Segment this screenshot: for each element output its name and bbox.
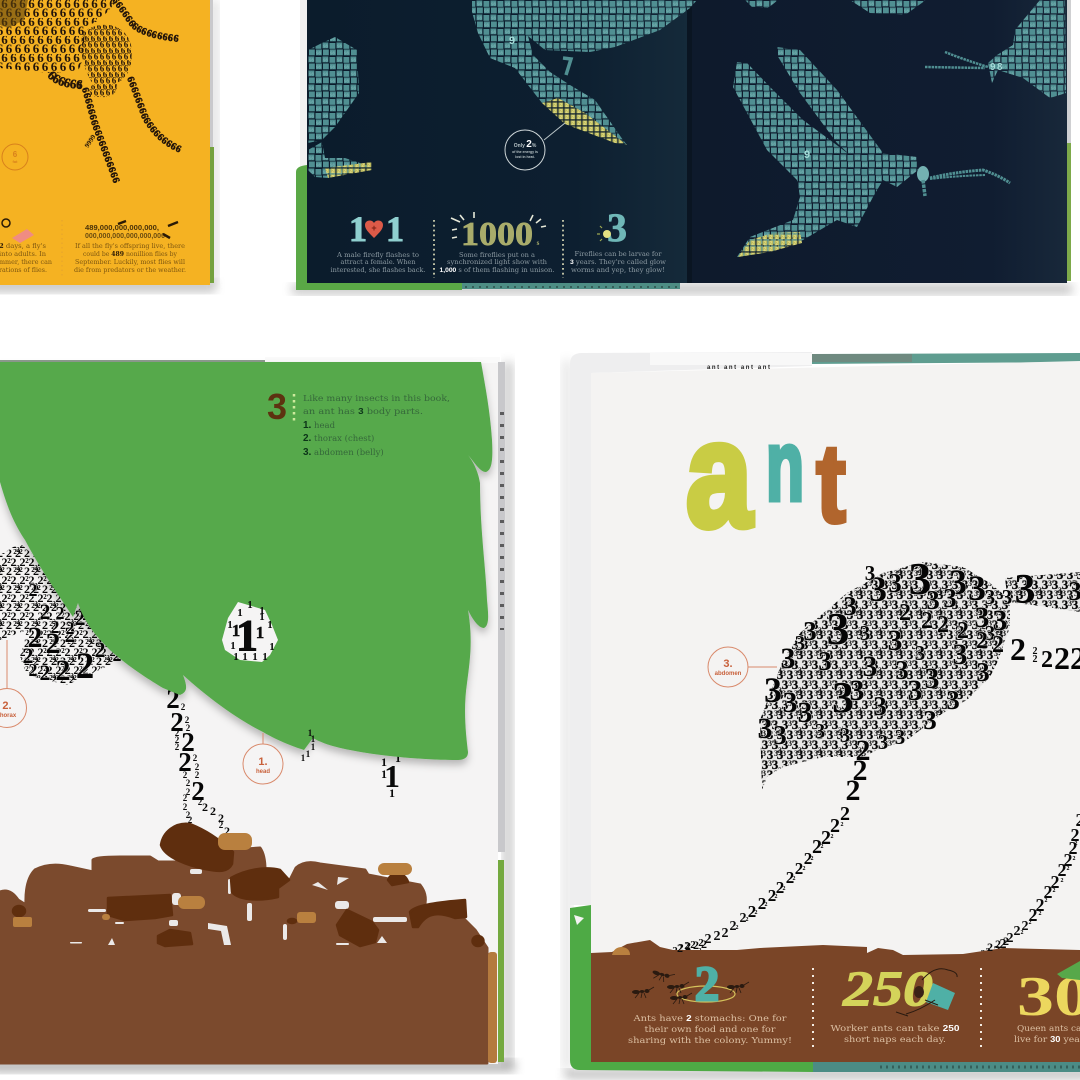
panel: left ant book page with leaf — [0, 357, 515, 1072]
stat: 3: Fireflies can be larvae for — [574, 250, 662, 258]
ant abdomen made of number 3: 333333333333 — [795, 561, 1012, 754]
callout: fly part number: 6 — [13, 150, 18, 159]
stat: offspring count: If all the fly's offspring live, there — [75, 243, 185, 250]
stat: 3: 3 years. They're called glow — [570, 258, 666, 266]
ant leg: left: 2222 — [812, 803, 850, 858]
hole in leaf showing ant head: 111111111111 — [227, 599, 275, 663]
stat: offspring count: die from predators or the weather. — [74, 267, 186, 274]
ant abdomen made of number 3: 3 — [908, 553, 932, 604]
stat: 3: 3 — [607, 205, 627, 250]
stat: 1 plus 1: attract a female. When — [340, 258, 416, 266]
ant leg: right: 22222 — [994, 919, 1028, 959]
callout: abdomen: 3. — [723, 658, 733, 670]
ant leg: right: 22222 — [976, 947, 992, 971]
stat: 2 stomachs: Ants have 2 stomachs: One for — [632, 1014, 787, 1023]
panel: dark firefly book spread — [292, 0, 1072, 294]
callout: head: head — [256, 769, 270, 775]
stat: 250 naps: 250 — [842, 960, 933, 1016]
icon: ants — [632, 967, 749, 1004]
stat: 30 years queen — [1014, 961, 1080, 1044]
ground strip: 2222 — [677, 937, 707, 955]
callout: abdomen: abdomen — [715, 671, 742, 677]
ant abdomen made of number 3: 2 — [1041, 647, 1053, 673]
callout: energy lost in heat — [505, 123, 565, 170]
stat: 1 plus 1: 1 — [386, 209, 404, 249]
callout: thorax: 2. — [2, 700, 12, 712]
hole in leaf showing ant head: 11 — [232, 621, 264, 642]
panel: right ant book page — [562, 352, 1080, 1078]
stat: 3 — [570, 205, 666, 274]
fact: 3 body parts: an ant has 3 body parts. — [303, 406, 423, 417]
leaf — [0, 362, 492, 760]
stat: 2 stomachs: 2 — [694, 955, 720, 1011]
title: ant: t — [816, 421, 846, 546]
ant leg: right — [976, 810, 1080, 971]
ant leg made of number 2: 222222222222222222 — [175, 702, 224, 830]
title: ant: n — [766, 410, 804, 522]
fact: 3 body parts: 3. abdomen (belly) — [303, 447, 384, 458]
ground strip: 222 — [987, 934, 1009, 954]
stat: 1000: synchronized light show with — [447, 258, 547, 266]
firefly: right partial — [925, 0, 1066, 98]
ant leg made of number 2: 22222 — [166, 684, 205, 806]
stat fragment: days to adulthood: rations of flies. — [0, 267, 47, 274]
ant abdomen made of number 3: 3 — [1014, 567, 1036, 613]
fly figure built from number 6 — [0, 0, 182, 183]
callout: fly part number: fat — [13, 159, 18, 164]
stat: 250 naps: short naps each day. — [844, 1035, 946, 1044]
fact: 3 body parts — [267, 386, 450, 458]
stat fragment: days to adulthood: mmer, there can — [0, 259, 52, 266]
title: ant — [686, 390, 846, 558]
stat fragment: days to adulthood — [0, 219, 52, 274]
ground strip — [591, 934, 1080, 1062]
firefly: centre with glowing abdomen: 9 — [509, 35, 515, 47]
stat: offspring count: 489,000,000,000,000, — [85, 225, 159, 232]
ant abdomen made of number 3: 3333333333333 — [773, 568, 1080, 750]
fact: 3 body parts: 2. thorax (chest) — [303, 433, 374, 444]
ant leg made of number 2: 2222 — [202, 800, 230, 838]
ant abdomen made of number 3: 22 — [1032, 646, 1038, 665]
callout: energy lost in heat: lost in heat. — [515, 155, 535, 159]
ant head and feet made of number 1: 1 — [384, 758, 400, 794]
ant abdomen made of number 3: 222222 — [899, 600, 1004, 658]
panel: yellow fly book spread — [0, 0, 220, 294]
panel: right ant book page: ant ant ant ant — [707, 365, 770, 371]
firefly: top fragments — [745, 0, 926, 15]
small digits at leaf notch: 11111 — [301, 728, 316, 763]
ant thorax made of number 2: 2 — [76, 646, 94, 687]
ant thorax made of number 2: 222 — [28, 621, 70, 687]
callout: head: 1. — [258, 756, 268, 768]
callout: fly part number — [2, 144, 28, 170]
fly figure built from number 6: 666666 — [48, 72, 82, 90]
stat: 250 naps: Worker ants can take 250 — [830, 1024, 960, 1033]
stat: 250 naps — [830, 960, 960, 1044]
stat: 30 years queen: 30 — [1017, 966, 1080, 1028]
rock pile and ground — [0, 824, 497, 1063]
stat: 1 plus 1: + — [371, 223, 377, 233]
stat: 2 stomachs: sharing with the colony. Yummy! — [628, 1036, 792, 1045]
firefly: large right figure: 9 — [804, 149, 810, 161]
stat: offspring count: 000,000,000,000,000,000 — [85, 233, 165, 240]
ant leg: left: 22222222 — [672, 937, 704, 966]
ant thorax made of number 2 — [0, 543, 130, 687]
firefly: left partial — [308, 37, 372, 178]
ant leg made of number 2 — [166, 684, 230, 838]
callout: abdomen — [708, 647, 777, 687]
stat: 1 plus 1: interested, she flashes back. — [330, 266, 426, 274]
stat: 1 plus 1 — [330, 209, 426, 274]
callout: head — [243, 733, 283, 784]
ant abdomen made of number 3: 3333 — [764, 562, 986, 710]
firefly: centre with glowing abdomen — [472, 0, 697, 145]
stat: offspring count — [62, 220, 186, 278]
fact: 3 body parts: Like many insects in this book, — [303, 394, 450, 404]
stat: 2 stomachs — [628, 955, 792, 1045]
stat: 1000: s — [537, 239, 540, 247]
ant abdomen made of number 3 — [758, 553, 1080, 807]
ant thorax made of number 2: 222222 — [22, 599, 106, 685]
ant abdomen made of number 3: 333333333333 — [758, 601, 1008, 745]
title: ant: a — [686, 390, 753, 558]
ant head and feet made of number 1: 1111 — [381, 751, 401, 800]
stat: 1000: Some fireflies put on a — [459, 251, 535, 259]
stat: 30 years queen: Queen ants can — [1017, 1024, 1080, 1033]
stat fragment: days to adulthood: into adults. In — [0, 251, 46, 258]
fly figure built from number 6: 6666 — [84, 134, 95, 148]
callout: energy lost in heat: of the energy is — [512, 150, 538, 154]
stat fragment: days to adulthood: 2 days, a fly's — [0, 243, 46, 250]
stat: offspring count: September. Luckily, most flies will — [75, 259, 185, 266]
ant abdomen made of number 3: 3 — [826, 603, 850, 654]
ant leg: left: 22222222222222 — [690, 822, 844, 956]
stat: 2 stomachs: their own food and one for — [644, 1025, 776, 1034]
firefly: large right figure — [733, 47, 1010, 257]
stat: 3: worms and yep, they glow! — [571, 266, 665, 274]
stat: 1 plus 1: A male firefly flashes to — [336, 251, 419, 259]
hole in leaf showing ant head: 1 — [236, 611, 258, 660]
fact: 3 body parts: 3 — [267, 386, 287, 427]
callout: thorax — [0, 640, 26, 728]
stat: 1000: 1,000 s of them flashing in unison. — [440, 266, 554, 274]
ant thorax made of number 2: 222222 — [28, 580, 122, 680]
icon: ant with blanket — [896, 969, 957, 1016]
firefly: right partial: 98 — [990, 62, 1003, 73]
ant leg: left: 22222 — [704, 911, 746, 947]
stat: 1000: 1000 — [461, 216, 533, 253]
fly figure built from number 6: 66666666666666666 — [127, 76, 182, 152]
ant leg: left: 2222222 — [748, 849, 812, 921]
callout: energy lost in heat: Only 2% — [514, 139, 537, 150]
stat: 1000 — [440, 212, 554, 274]
ant abdomen made of number 3: 3 — [832, 673, 854, 722]
stat: 1 plus 1: 1 — [349, 209, 367, 249]
fact: 3 body parts: 1. head — [303, 420, 336, 431]
ant abdomen made of number 3: 222 — [846, 734, 870, 807]
ant leg: right: 222222222 — [1020, 841, 1078, 936]
stat: offspring count: could be 489 nonillion flies by — [83, 251, 178, 258]
